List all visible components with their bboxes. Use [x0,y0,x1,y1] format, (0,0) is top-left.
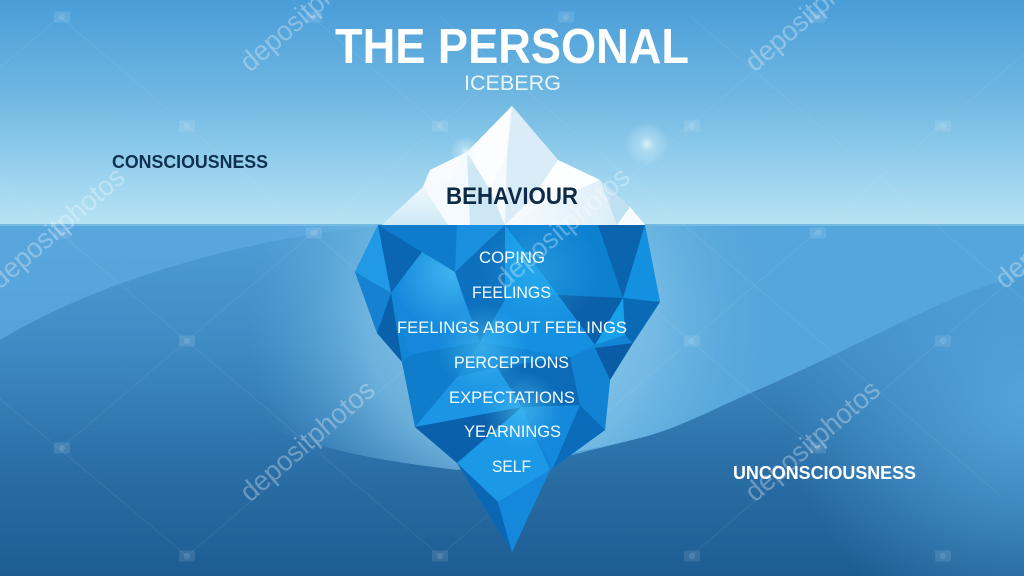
water surface highlight [0,224,1024,226]
sun glow [625,122,669,166]
list of below-water layers: FEELINGS [472,284,551,302]
list of below-water layers: PERCEPTIONS [454,354,569,372]
title: THE PERSONAL [335,20,689,74]
iceberg below water [355,210,660,552]
label: unconsciousness: UNCONSCIOUSNESS [733,462,916,483]
list of below-water layers: YEARNINGS [464,423,561,441]
list of below-water layers: COPING [479,249,545,267]
label: consciousness: CONSCIOUSNESS [112,151,268,172]
watermark text: depositphotos [739,374,886,508]
subtitle: ICEBERG [464,72,561,95]
sky background [0,0,1024,226]
watermark text: depositphotos [489,161,636,295]
iceberg above water [382,106,645,225]
label: behaviour: BEHAVIOUR [446,183,578,210]
list of below-water layers: EXPECTATIONS [449,389,575,407]
watermark text: depositphotos [234,374,381,508]
list of below-water layers: SELF [492,458,531,476]
list of below-water layers [397,249,627,476]
underwater background [0,225,1024,576]
list of below-water layers: FEELINGS ABOUT FEELINGS [397,319,627,337]
